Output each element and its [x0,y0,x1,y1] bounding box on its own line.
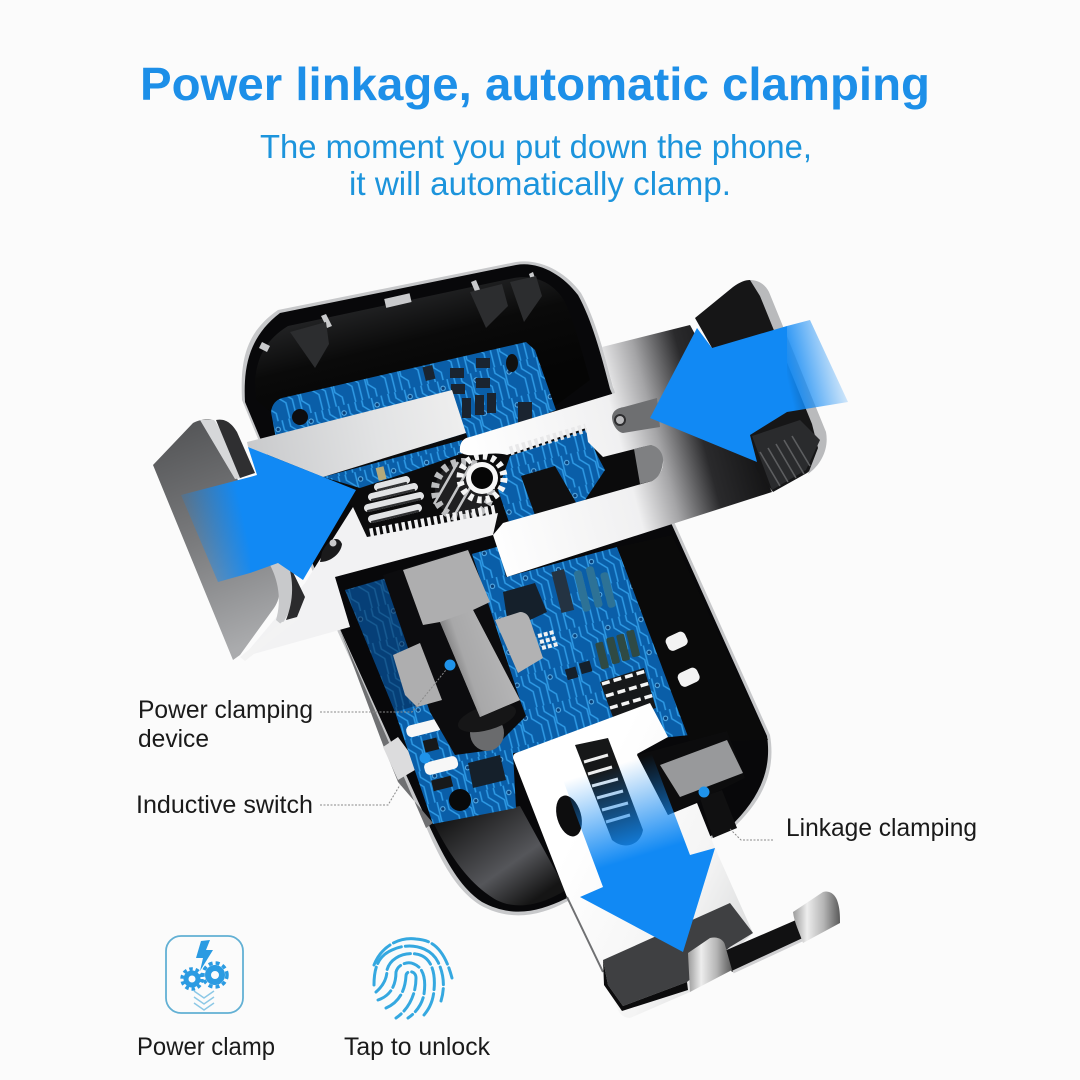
subtitle: it will automatically clamp. [349,165,731,202]
ic chips [468,569,592,788]
upper-left silver band [247,390,466,477]
callout: power clamping device [138,660,456,753]
title: Power linkage, automatic clamping [140,58,930,110]
gray tabs [495,612,543,673]
left idle gear [435,462,491,518]
lower clip [513,703,840,1018]
arrow: right clamp [650,320,848,462]
left jaw [153,419,305,661]
label: power clamp: Power clamp [137,1033,275,1061]
lower housing recess [433,806,566,905]
callout: inductive switch [136,752,430,819]
pcb strip above gears [323,440,466,488]
chrome hook right [793,892,840,943]
callout: inductive switch: Inductive switch [136,791,313,819]
upper circuit board [271,342,556,460]
resistor array [600,668,656,720]
label: tap to unlock: Tap to unlock [344,1033,490,1061]
chrome clips on housing [259,272,537,352]
gray T-shaped block [403,550,520,717]
chrome hook centre [688,937,732,992]
gear window [323,428,660,540]
right jaw [695,280,827,492]
dot grid [538,632,558,648]
icon: fingerprint [374,939,452,1018]
slot chrome end [634,445,663,484]
callout: power clamping device: device [138,725,209,753]
rubber pad [603,903,753,1006]
arrow: left clamp [181,447,356,582]
subtitle [260,128,812,202]
motor [383,548,526,755]
white contact pieces [405,718,459,776]
toothed slot [575,738,643,845]
right silver arm with rack [460,325,772,577]
linkage block [637,731,745,838]
main gear [460,456,504,500]
arrow: downward [563,752,715,952]
hook bar [722,920,803,972]
pivot bracket [612,398,660,433]
product: car phone holder cutaway [153,261,848,1018]
oval slot [552,793,586,839]
spring [368,480,420,522]
icon: power clamp [166,936,243,1013]
dark side rail [216,420,255,478]
callout: linkage clamping [698,786,977,842]
lower-left silver arm with rack [243,507,498,657]
green resistors [595,629,640,670]
lower circuit board [345,535,768,824]
chrome side edge [200,420,242,479]
blue resistors [573,566,616,612]
left lower gray strip [340,630,433,828]
callout: power clamping device: Power clamping [138,696,313,724]
subtitle: The moment you put down the phone, [260,128,812,165]
housing shell [242,261,771,915]
dark side channel [617,535,768,742]
chrome switch piece on housing [383,737,420,780]
callout: linkage clamping: Linkage clamping [786,814,977,842]
